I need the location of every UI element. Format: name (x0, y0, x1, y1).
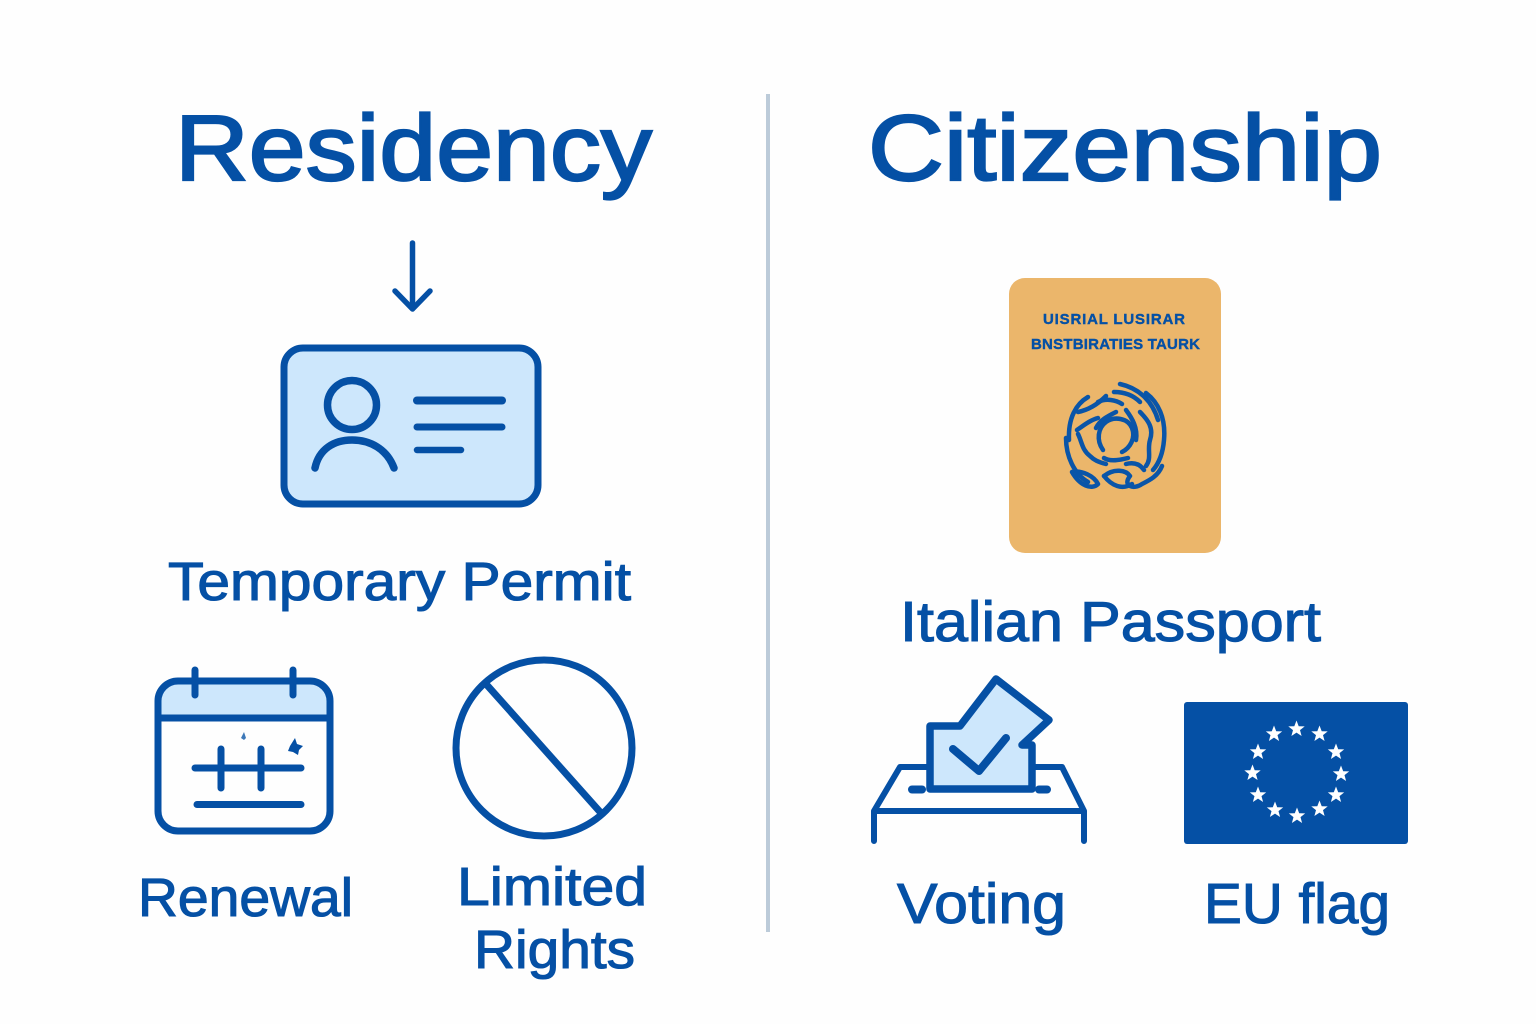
label: EU flag: EU flag (1204, 872, 1390, 936)
label: Voting: Voting (897, 872, 1066, 936)
label: Limited Rights: Limited (457, 857, 647, 917)
divider (766, 94, 770, 932)
icon: passport: UISRIAL LUSIRAR (1043, 311, 1185, 328)
label: Limited Rights (457, 857, 647, 980)
heading: Citizenship: Citizenship (868, 96, 1382, 200)
panel: residency (138, 96, 653, 980)
arrow: down (395, 243, 430, 309)
label: Italian Passport: Italian Passport (900, 590, 1321, 654)
icon: renewal calendar (158, 670, 330, 831)
icon: EU flag (1184, 702, 1408, 844)
emblem: wreath (1066, 384, 1164, 487)
icon: passport: BNSTBIRATIES TAURK (1031, 336, 1200, 353)
icon: ID card (284, 348, 538, 504)
label: Renewal: Renewal (138, 868, 353, 928)
icon: passport (1009, 278, 1221, 553)
label: Temporary Permit: Temporary Permit (168, 552, 631, 612)
icon: prohibition sign (456, 660, 632, 836)
icon: ballot box (874, 679, 1084, 841)
panel: citizenship (868, 96, 1408, 936)
label: Limited Rights: Rights (474, 920, 635, 980)
heading: Residency: Residency (175, 96, 653, 200)
